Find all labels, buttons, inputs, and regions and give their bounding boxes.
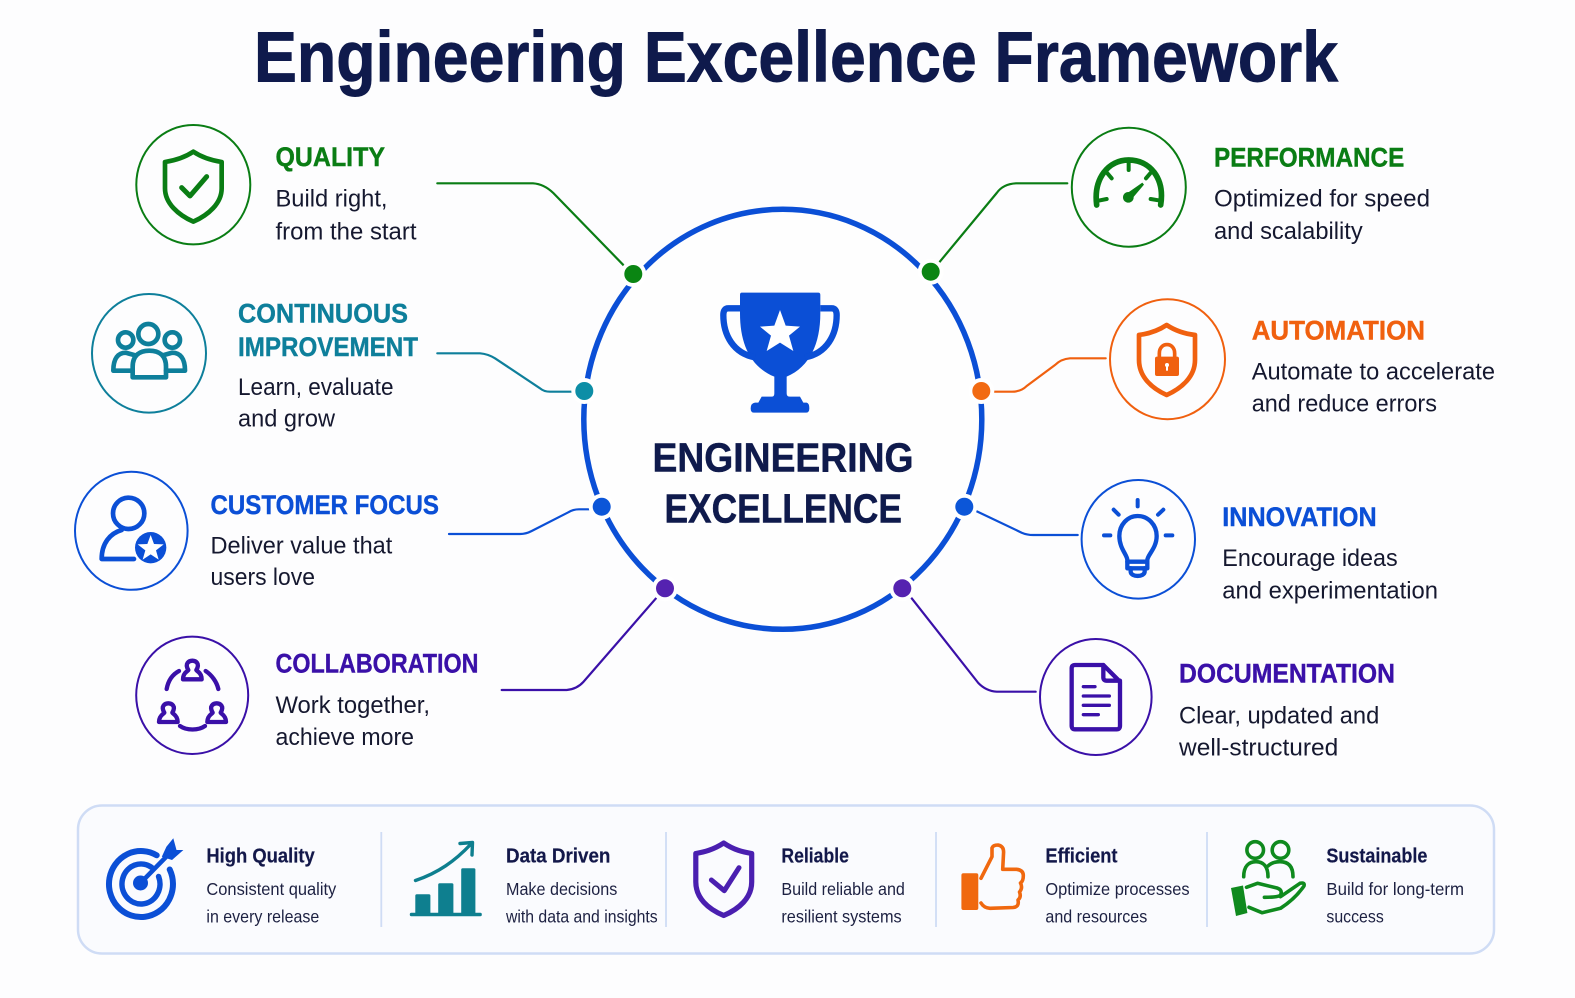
- description: and reduce errors: [1252, 391, 1437, 418]
- title: Engineering Excellence Framework: [254, 18, 1338, 98]
- icon: shield lock: [1110, 299, 1225, 419]
- icon: shield check: [136, 125, 250, 244]
- connector: performance: [918, 183, 1067, 285]
- panel: quality: [136, 125, 417, 245]
- panel: innovation: [1082, 480, 1438, 604]
- description: Automate to accelerate: [1252, 358, 1495, 385]
- connector: quality: [437, 183, 646, 287]
- item text: and resources: [1045, 906, 1148, 926]
- description: Encourage ideas: [1222, 545, 1398, 572]
- item text: Efficient: [1045, 845, 1118, 867]
- icon: team: [92, 294, 206, 413]
- summary item: high quality: [109, 838, 337, 926]
- item text: resilient systems: [781, 906, 902, 926]
- item text: in every release: [206, 906, 319, 926]
- connector: documentation: [889, 575, 1036, 692]
- icon: light bulb: [1082, 480, 1195, 599]
- panel: collaboration: [136, 637, 478, 754]
- heading: AUTOMATION: [1252, 315, 1425, 345]
- item text: Consistent quality: [206, 879, 337, 899]
- connector: continuous improvement: [437, 353, 597, 404]
- panel: bottom summary bar: [78, 806, 1494, 954]
- icon: people in hand: [1231, 842, 1304, 916]
- heading: CUSTOMER FOCUS: [210, 490, 439, 520]
- description: Learn, evaluate: [238, 374, 394, 401]
- panel: customer focus: [75, 472, 439, 591]
- panel: performance: [1072, 128, 1430, 247]
- icon: shield check: [696, 843, 752, 916]
- description: Deliver value that: [210, 532, 392, 559]
- heading: INNOVATION: [1222, 502, 1377, 532]
- description: Optimized for speed: [1214, 186, 1430, 213]
- connector: collaboration: [502, 575, 678, 690]
- heading: QUALITY: [276, 142, 385, 172]
- description: and grow: [238, 406, 335, 433]
- summary item: data driven: [410, 842, 658, 926]
- hub label: EXCELLENCE: [664, 485, 902, 531]
- panel: continuous improvement: [92, 294, 418, 433]
- description: Work together,: [276, 692, 430, 719]
- summary item: reliable: [696, 843, 905, 926]
- icon: thumbs up: [961, 845, 1023, 910]
- description: Clear, updated and: [1179, 702, 1379, 729]
- icon: trophy: [723, 293, 837, 413]
- description: from the start: [276, 218, 417, 245]
- panel: documentation: [1040, 639, 1395, 762]
- description: achieve more: [276, 724, 414, 751]
- summary item: efficient: [961, 845, 1190, 926]
- icon: document: [1040, 639, 1152, 755]
- heading: IMPROVEMENT: [238, 332, 418, 362]
- connector: customer focus: [449, 494, 615, 534]
- item text: Reliable: [781, 845, 849, 867]
- item text: with data and insights: [505, 906, 658, 926]
- hub ring: [584, 209, 982, 629]
- icon: bar chart with arrow: [410, 842, 482, 916]
- summary item: sustainable: [1231, 842, 1464, 926]
- description: users love: [210, 564, 315, 591]
- item text: Build reliable and: [781, 879, 905, 899]
- heading: CONTINUOUS: [238, 299, 408, 329]
- icon: user star: [75, 472, 188, 590]
- icon: target: [109, 838, 183, 917]
- hub label: ENGINEERING: [652, 435, 914, 481]
- item text: Build for long-term: [1326, 879, 1464, 899]
- item text: Make decisions: [506, 879, 618, 899]
- item text: success: [1326, 906, 1384, 926]
- central hub: [584, 209, 982, 629]
- description: and experimentation: [1222, 577, 1438, 604]
- icon: collaboration cycle: [136, 637, 248, 754]
- description: and scalability: [1214, 218, 1363, 245]
- heading: DOCUMENTATION: [1179, 659, 1395, 689]
- heading: COLLABORATION: [276, 649, 478, 679]
- description: Build right,: [276, 186, 388, 213]
- heading: PERFORMANCE: [1214, 142, 1404, 172]
- item text: Data Driven: [506, 845, 610, 867]
- panel: automation: [1110, 299, 1495, 419]
- icon: gauge: [1072, 128, 1186, 247]
- item text: High Quality: [206, 845, 315, 867]
- item text: Sustainable: [1326, 845, 1427, 867]
- connector: innovation: [951, 494, 1078, 535]
- connector: automation: [968, 358, 1106, 404]
- description: well-structured: [1178, 735, 1338, 762]
- item text: Optimize processes: [1045, 879, 1190, 899]
